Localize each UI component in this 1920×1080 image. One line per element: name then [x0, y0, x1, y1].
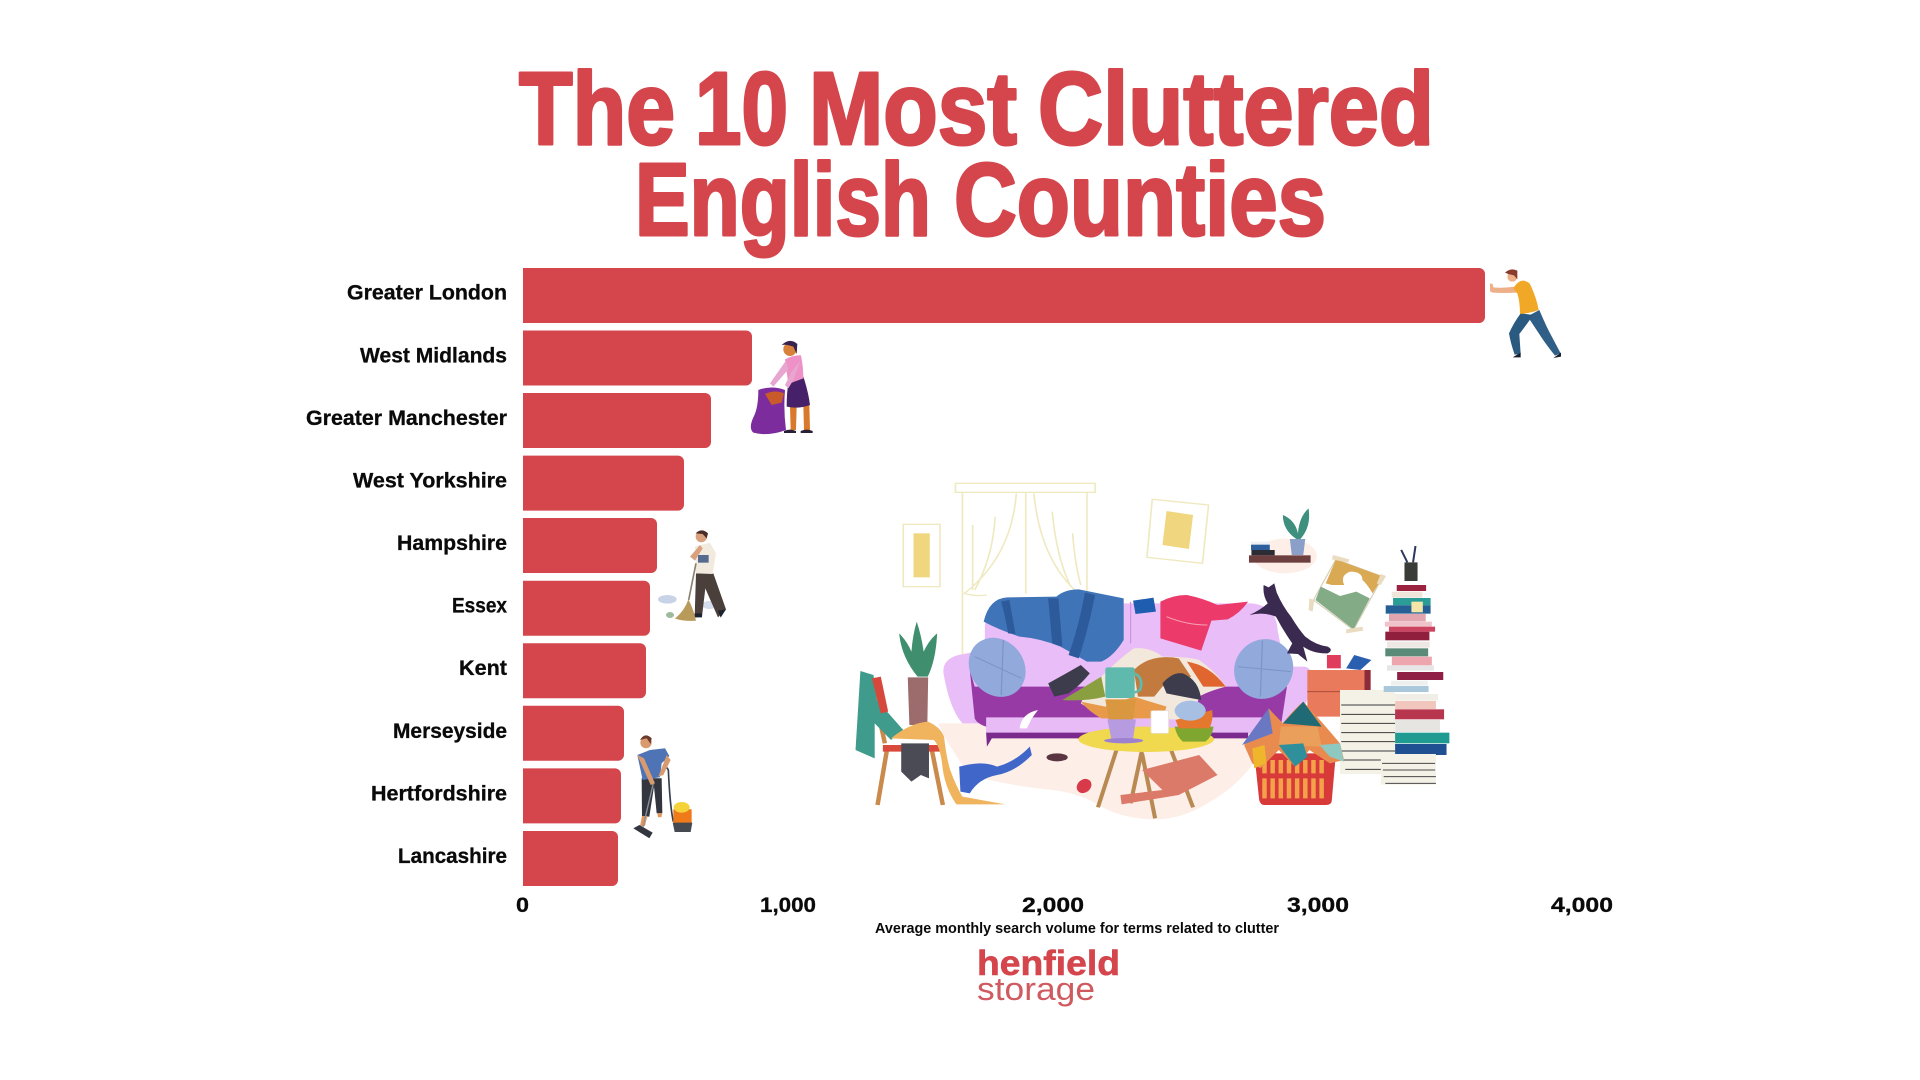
title: Counties [954, 142, 1326, 257]
county labels: Hampshire [397, 532, 507, 555]
county labels: Lancashire [398, 845, 507, 868]
tall stack of books [1384, 546, 1449, 755]
logo: henfield storage: storage [977, 971, 1095, 1007]
icon: man sweeping [658, 530, 726, 621]
county labels: West Midlands [360, 344, 507, 368]
cat [1249, 583, 1331, 662]
floor [938, 723, 1259, 819]
county labels: Kent [459, 657, 507, 680]
pink blanket [1160, 595, 1248, 651]
title: English [635, 142, 931, 257]
small stack of papers [1381, 754, 1436, 785]
wall picture left [903, 524, 940, 587]
axis tick labels: 0 [516, 894, 529, 917]
title: 10 [695, 51, 788, 166]
stacked mugs [1105, 667, 1141, 720]
axis tick labels: 4,000 [1551, 894, 1613, 917]
axis title: Average monthly search volume for terms related to clutter [875, 920, 1279, 937]
blue sock [959, 747, 1032, 793]
blue book [1133, 598, 1156, 614]
icon: man pushing bar [1490, 269, 1561, 358]
chair with clothes [856, 671, 1005, 805]
pile of clothes [1048, 648, 1226, 720]
rug and clothes on floor [1120, 755, 1218, 804]
bar chart [306, 268, 1613, 937]
sofa cushions [961, 632, 1298, 702]
axis tick labels: 2,000 [1022, 894, 1084, 917]
title [519, 51, 1434, 257]
laundry basket [1242, 702, 1344, 805]
cups and bowls on table [1104, 701, 1213, 743]
logo: henfield storage [977, 944, 1120, 1007]
plant [899, 622, 937, 725]
axis tick labels [516, 894, 1613, 917]
drawers [1307, 655, 1371, 717]
illustration: cluttered living room [856, 483, 1449, 819]
county labels: West Yorkshire [353, 470, 507, 492]
axis tick labels: 3,000 [1287, 894, 1349, 917]
torn poster [1309, 555, 1386, 633]
icon: man vacuuming [633, 735, 692, 838]
title: Most [809, 51, 1017, 166]
blue blanket [984, 589, 1124, 662]
axis tick labels: 1,000 [760, 894, 816, 917]
county labels: Essex [452, 594, 507, 618]
icon: woman with rubbish bag [751, 341, 813, 434]
pile of papers [1340, 690, 1395, 774]
shelf with plant and books [1249, 508, 1317, 573]
wall picture right [1147, 499, 1209, 563]
title: Cluttered [1038, 51, 1434, 166]
county labels: Greater London [347, 282, 507, 304]
county labels: Hertfordshire [371, 782, 507, 806]
logo: henfield storage: henfield [977, 944, 1120, 983]
county labels: Merseyside [393, 720, 507, 743]
county labels [306, 282, 507, 868]
title: The [519, 51, 675, 166]
sofa [943, 602, 1312, 747]
bars [523, 268, 1485, 886]
window and curtains [956, 483, 1095, 657]
slippers [1047, 753, 1094, 795]
table [1078, 727, 1214, 818]
county labels: Greater Manchester [306, 407, 507, 430]
